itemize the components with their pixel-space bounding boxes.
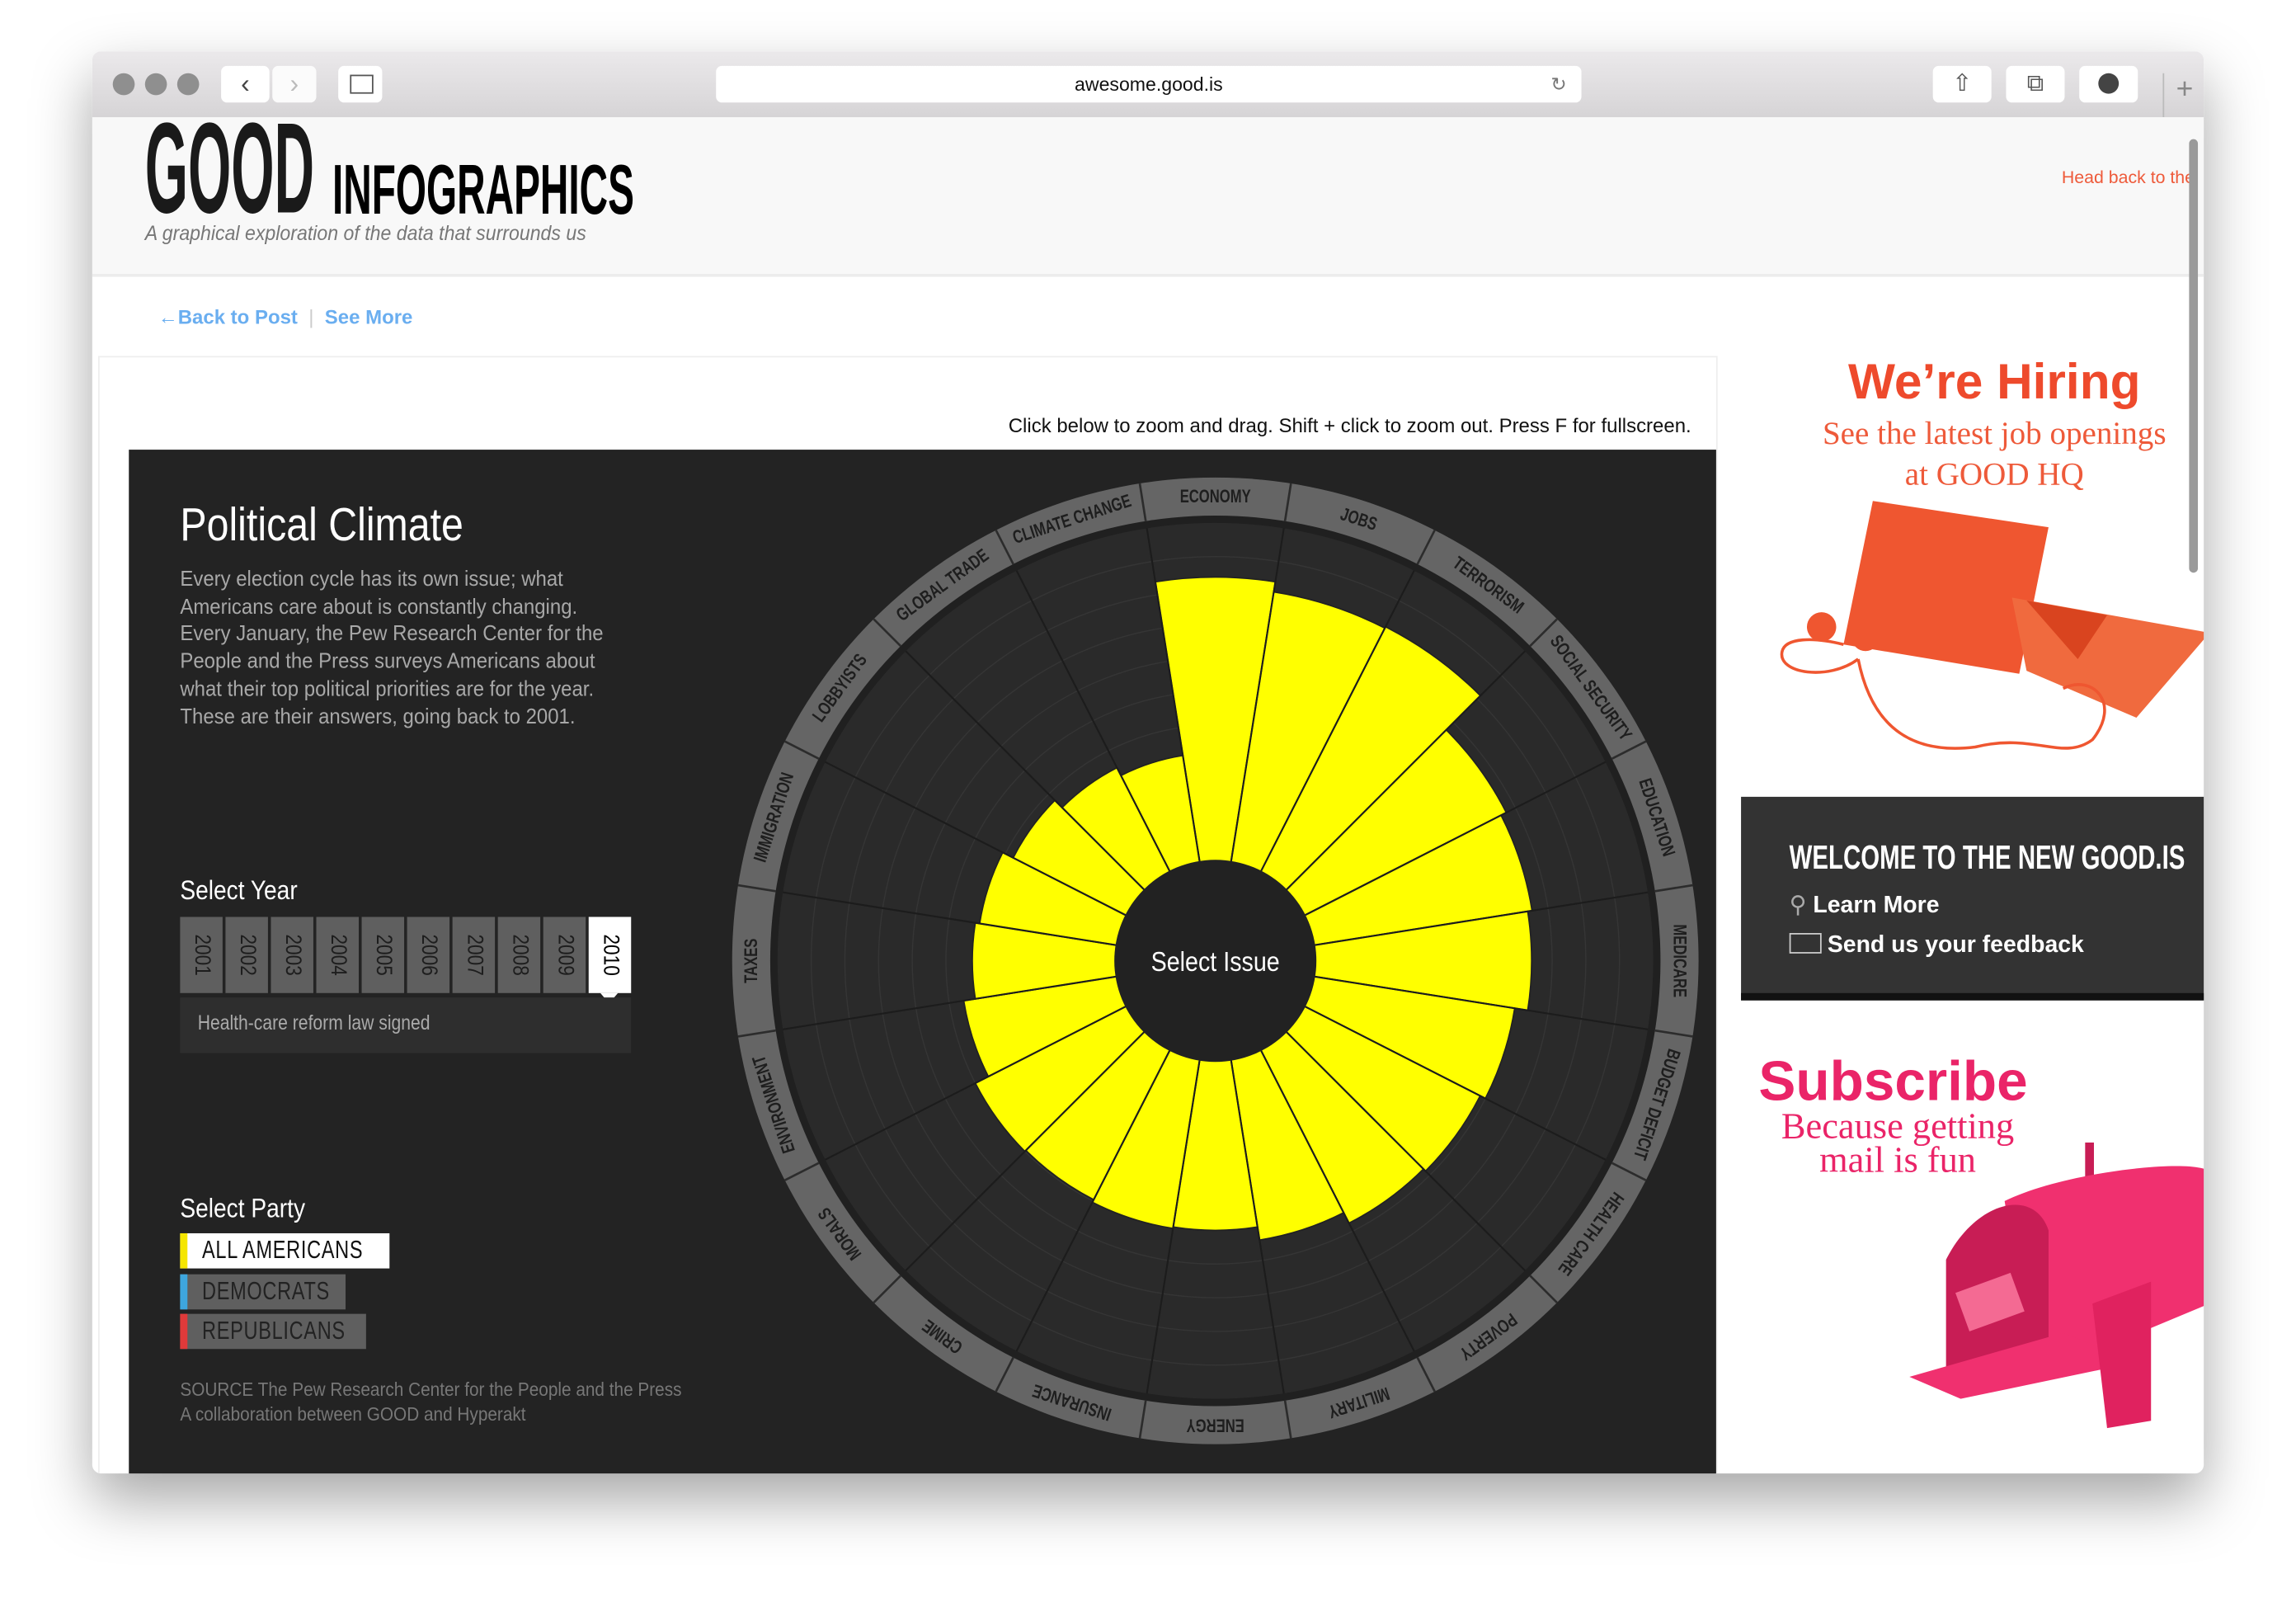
chart: polar issue chart: Select Issue [1151,946,1280,978]
nav buttons: › [290,68,299,98]
address bar [716,66,1582,102]
ring labels: TAXES [741,939,762,983]
year selector: 2001 [189,934,214,976]
icon: window buttons [112,73,200,96]
toolbar [92,51,2204,119]
instruction text: Click below to zoom and drag. Shift + click to zoom out. Press F for fullscreen. [1009,414,1691,436]
panel: political climate [129,450,1716,1473]
sidebar: subscribe ad: Subscribe [1758,1052,2028,1113]
icon: key + learn more: ⚲ Learn More [1790,893,1939,918]
ring labels: IMMIGRATION [750,771,798,865]
icon: envelope + feedback: Send us your feedback [1828,933,2084,958]
toolbar right buttons: ⧉ [2027,72,2044,97]
ring labels: ENERGY [1187,1415,1244,1435]
year selector: 2005 [370,934,395,976]
heading: select year: Select Year [180,876,298,905]
yellow wedges [961,577,1536,1243]
year caption [180,997,631,1053]
ring labels: MILITARY [1325,1383,1392,1421]
header band [92,117,2204,277]
year selector [180,917,632,1053]
ring labels: GLOBAL TRADE [892,545,993,625]
ring labels [741,487,1690,1435]
sidebar: hiring ad: at GOOD HQ [1905,455,2084,492]
year selector: 2007 [461,934,486,976]
ring labels: LOBBYISTS [809,650,872,726]
source text: SOURCE The Pew Research Center for the People and the Press [180,1378,682,1400]
sidebar: welcome box [1741,797,2204,1001]
ring labels: HEALTH CARE [1554,1188,1628,1279]
address bar: awesome.good.is [1075,73,1223,95]
party buttons [180,1232,389,1350]
title: Political Climate [180,498,463,551]
party buttons: REPUBLICANS [202,1317,346,1345]
party buttons: ALL AMERICANS [202,1237,363,1264]
sidebar: subscribe ad: mail is fun [1819,1141,1976,1181]
content box [98,356,1718,1487]
heading: select party: Select Party [180,1194,305,1223]
toolbar right buttons [1933,66,2138,102]
icon: mailbox [1909,1142,2204,1429]
year selector: 2009 [552,934,577,976]
description: Every election cycle has its own issue; what Americans care about is constantly changing. Every January, the Pew Research Center for the People and the Press surveys Americans about what their top political priorities are for the year. These are their answers, going back to 2001. [180,568,604,728]
sidebar: subscribe ad: Because getting [1781,1107,2014,1147]
logo: INFOGRAPHICS [332,153,634,230]
ring labels: ENVIRONMENT [749,1053,800,1156]
source text: A collaboration between GOOD and Hyperakt [180,1403,526,1426]
party buttons: DEMOCRATS [202,1277,330,1305]
ring labels: BUDGET DEFICIT [1629,1046,1684,1162]
ring labels: POVERTY [1456,1308,1521,1364]
year caption: Health-care reform law signed [198,1011,430,1034]
scrollbar [2189,139,2198,573]
ring labels: EDUCATION [1635,776,1679,859]
toolbar right buttons: ⇧ [1952,72,1972,97]
logo: GOOD [145,95,314,240]
nav buttons: ‹ [241,68,250,98]
ring labels: JOBS [1338,504,1380,535]
ring labels: CRIME [919,1315,967,1358]
sidebar: hiring ad: See the latest job openings [1823,414,2167,451]
tagline: A graphical exploration of the data that surrounds us [145,221,586,245]
toolbar: + [2176,73,2193,106]
year selector: 2008 [506,934,532,976]
year selector: 2010 [597,934,623,976]
year selector: 2006 [416,934,440,976]
nav buttons [221,66,383,102]
logo [145,95,634,240]
center circle [1114,860,1316,1062]
ring labels: SOCIAL SECURITY [1546,632,1635,745]
ring labels: MEDICARE [1669,924,1690,997]
address bar: ↻ [1550,73,1567,95]
ring labels: MORALS [814,1204,866,1264]
ring labels: TERRORISM [1449,553,1527,618]
sidebar: welcome box: WELCOME TO THE NEW GOOD.IS [1790,838,2185,876]
year selector: 2003 [280,934,304,976]
sidebar: subscribe ad [1758,1052,2204,1429]
year selector: 2002 [234,934,259,976]
sidebar: hiring ad [1780,355,2204,750]
header link: Head back to the [2062,167,2195,187]
nav links: ←Back to Post | See More [158,306,412,328]
source text [180,1378,682,1426]
ring labels: ECONOMY [1180,487,1251,507]
ring labels: INSURANCE [1030,1380,1114,1425]
ring labels: CLIMATE CHANGE [1010,491,1134,549]
sidebar: hiring ad: We’re Hiring [1848,355,2140,410]
year selector: 2004 [325,934,350,976]
icon: laptop illustration [1780,501,2204,750]
